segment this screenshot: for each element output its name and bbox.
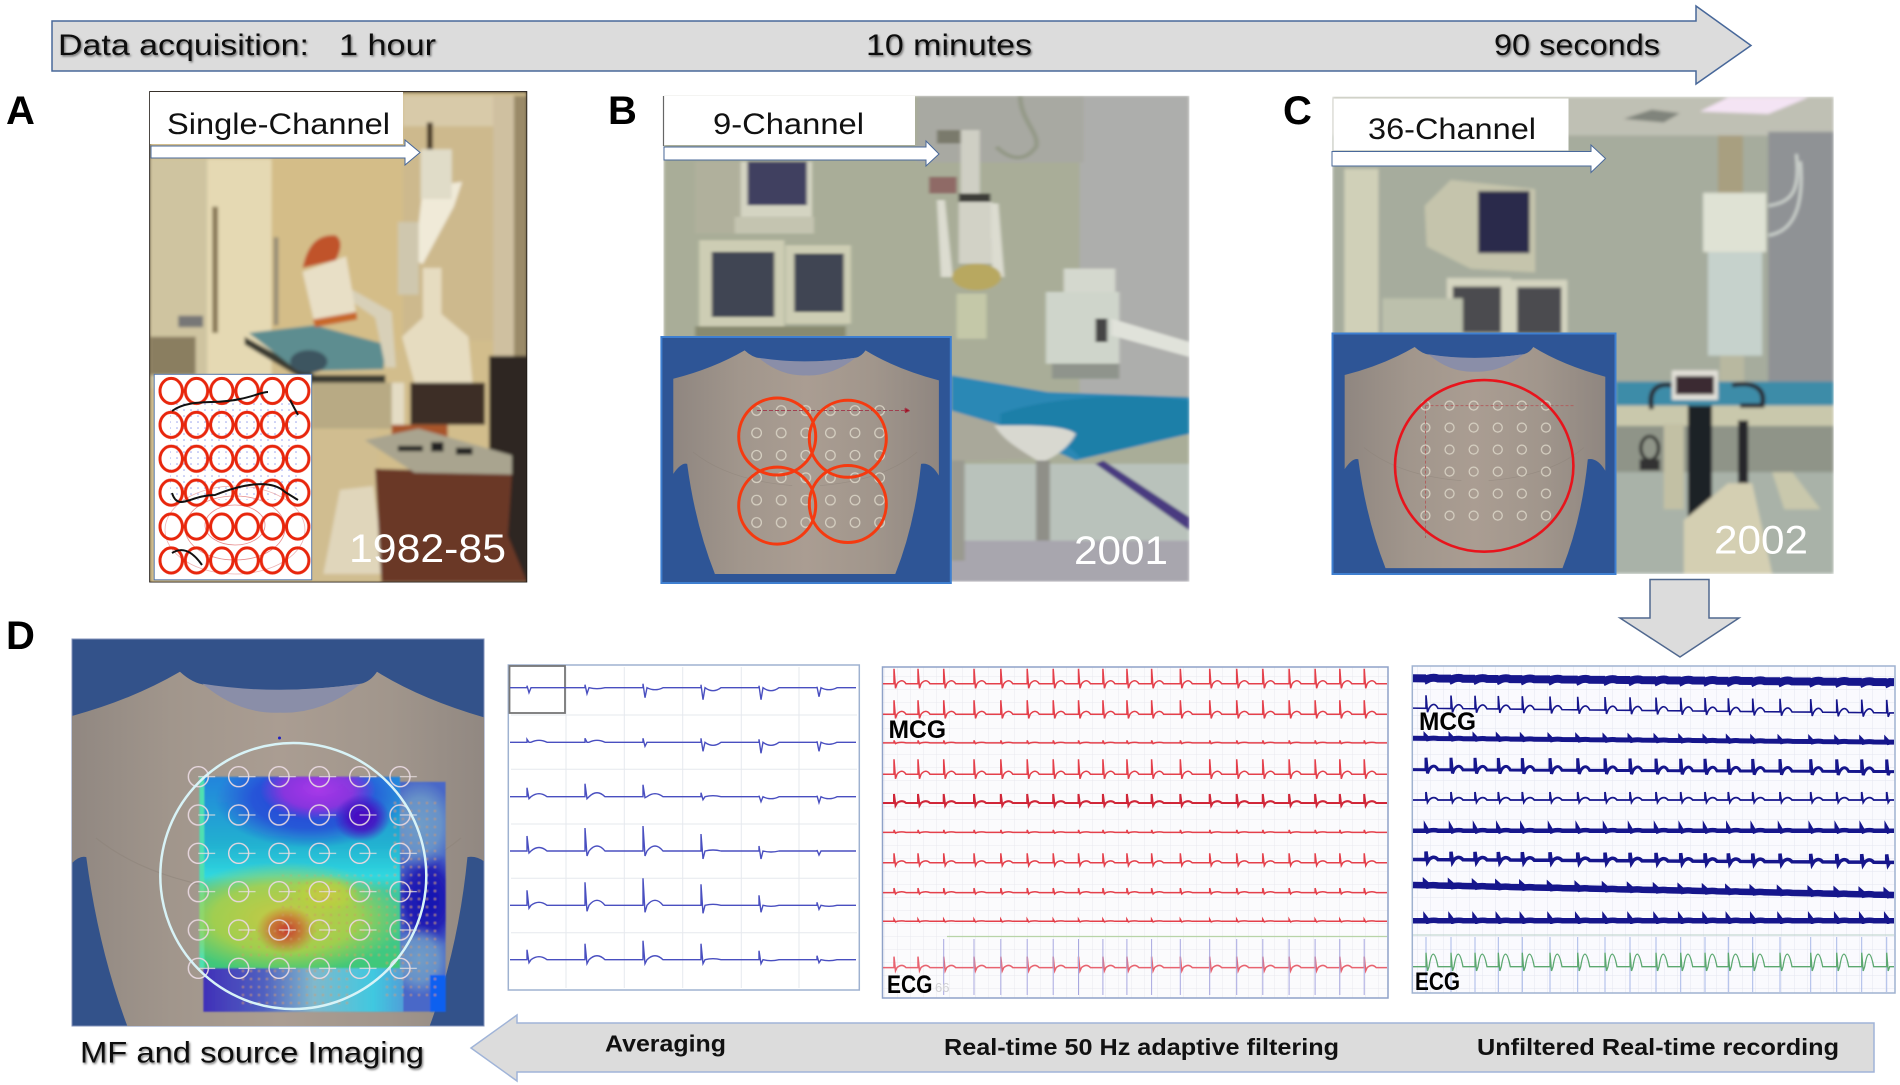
label: Single-Channel bbox=[150, 92, 403, 144]
heat map: magnetic field overlay bbox=[198, 776, 447, 1013]
label: Single-Channel: Single-Channel bbox=[167, 108, 390, 141]
arrow: down to recording bbox=[1620, 580, 1739, 657]
blue MCG waveforms bbox=[1413, 676, 1894, 921]
red detection circle bbox=[1395, 380, 1573, 552]
label: 36-Channel: 36-Channel bbox=[1368, 113, 1536, 146]
torso bbox=[673, 350, 939, 574]
source dots bbox=[240, 800, 440, 1010]
separator bbox=[947, 936, 1387, 938]
faint value: 66 bbox=[935, 980, 949, 995]
reference point bbox=[278, 736, 281, 740]
text: 90 seconds: 90 seconds bbox=[1494, 29, 1660, 62]
sensor grid bbox=[1413, 395, 1558, 527]
panel: A single-channel system 1982-85 bbox=[149, 91, 527, 583]
text: Averaging: Averaging bbox=[605, 1030, 726, 1056]
ECG markers bbox=[944, 939, 1364, 995]
red sensor circles grid bbox=[159, 374, 310, 577]
red MCG waveforms bbox=[883, 669, 1387, 971]
text: 1 hour: 1 hour bbox=[339, 29, 436, 62]
panel: D magnetic field and source imaging bbox=[64, 639, 497, 1037]
text: data acquisition label: Data acquisition: bbox=[58, 29, 309, 62]
panel: C 36-channel system 2002 bbox=[1332, 97, 1834, 574]
axis line bbox=[757, 408, 910, 413]
inset: chest with 36-channel sensor array bbox=[1332, 334, 1616, 574]
arrow: 36-channel pointer bbox=[1332, 145, 1606, 172]
photo: 9-channel lab room bbox=[663, 96, 1189, 582]
inset: chest with 9-channel sensor groups bbox=[661, 337, 951, 583]
year label 1982-85: 1982-85 bbox=[349, 527, 506, 571]
averaged waveforms bbox=[510, 684, 856, 964]
heading: panel letter A: A bbox=[6, 89, 35, 133]
green ECG waveform bbox=[1413, 953, 1894, 971]
arrow: data acquisition timeline bbox=[52, 6, 1751, 84]
label: ECG: ECG bbox=[887, 971, 932, 999]
arrow: 9-channel pointer bbox=[664, 141, 939, 166]
heading: panel letter C: C bbox=[1283, 89, 1312, 133]
black isoline curves bbox=[172, 392, 298, 565]
label: ECG: ECG bbox=[1415, 968, 1460, 996]
year label 2002: 2002 bbox=[1714, 518, 1808, 562]
red SQUID circles bbox=[739, 398, 886, 544]
axes bbox=[1426, 406, 1575, 538]
text: Real-time 50 Hz adaptive filtering: Real-time 50 Hz adaptive filtering bbox=[944, 1034, 1339, 1060]
label: 36-Channel bbox=[1334, 98, 1568, 150]
text: Unfiltered Real-time recording: Unfiltered Real-time recording bbox=[1477, 1034, 1839, 1060]
torso bbox=[64, 672, 497, 1037]
separator bbox=[1413, 934, 1894, 936]
heading: panel letter D: D bbox=[6, 614, 35, 658]
chart: filtered MCG and ECG traces bbox=[882, 667, 1388, 999]
torso bbox=[1345, 347, 1605, 568]
caption: MF and source Imaging: MF and source Imaging bbox=[80, 1036, 424, 1070]
photo: single-channel lab room bbox=[149, 91, 527, 583]
inset: single-channel grid map bbox=[154, 374, 312, 580]
photo: 36-channel lab room bbox=[1332, 97, 1834, 574]
chart: unfiltered MCG and ECG traces bbox=[1412, 666, 1895, 996]
text: 10 minutes: 10 minutes bbox=[866, 29, 1032, 62]
ECG markers bbox=[1426, 937, 1887, 992]
heading: panel letter B: B bbox=[608, 89, 637, 133]
label: 9-Channel: 9-Channel bbox=[713, 108, 864, 141]
label: 9-Channel bbox=[663, 96, 915, 146]
chart: averaged traces bbox=[508, 665, 859, 990]
year label 2001: 2001 bbox=[1074, 529, 1168, 573]
arrow: processing pipeline bbox=[471, 1015, 1874, 1081]
selection box bbox=[510, 666, 565, 713]
label: MCG: MCG bbox=[1419, 708, 1476, 736]
white detection circle bbox=[160, 743, 426, 1009]
arrow: single-channel pointer bbox=[151, 140, 420, 165]
sensor grid bbox=[744, 399, 892, 534]
label: MCG: MCG bbox=[888, 716, 946, 744]
sensor grid bbox=[178, 758, 420, 988]
panel: B 9-channel system 2001 bbox=[661, 96, 1189, 583]
